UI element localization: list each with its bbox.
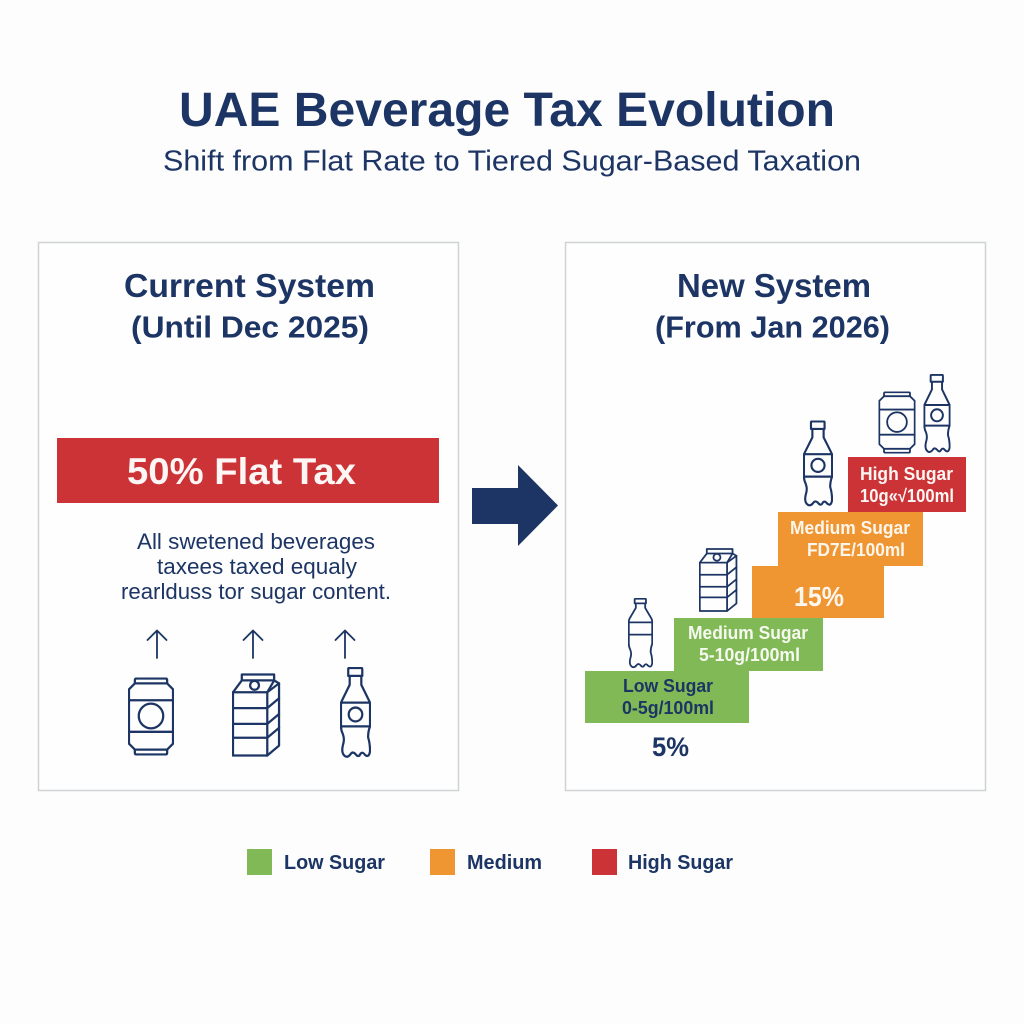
rate: 5%: 5% — [652, 732, 689, 762]
description text: taxees taxed equaly — [157, 554, 357, 579]
panel: current system — [38, 242, 458, 790]
arrow: up over can — [148, 630, 166, 658]
legend item: high sugar: High Sugar — [628, 852, 733, 874]
heading: new system: New System — [677, 267, 871, 304]
flat tax banner: 50% Flat Tax — [127, 451, 356, 492]
description text — [121, 529, 391, 604]
legend item: low sugar — [247, 849, 385, 875]
step: medium sugar green: 5-10g/100ml — [699, 645, 800, 665]
icon: carton — [233, 674, 279, 756]
description text: All swetened beverages — [137, 529, 375, 554]
heading: new system: (From Jan 2026) — [655, 310, 890, 344]
step: 15% rate: 15% — [794, 581, 844, 612]
description text: rearlduss tor sugar content. — [121, 579, 391, 604]
icon: bottle on step — [804, 421, 832, 505]
heading: current system — [124, 267, 375, 344]
heading: current system: (Until Dec 2025) — [131, 310, 369, 344]
legend item: low sugar: Low Sugar — [284, 852, 385, 874]
legend item: high sugar — [592, 849, 733, 875]
icon: plain bottle — [629, 599, 652, 667]
legend item: medium — [430, 849, 542, 875]
icon: can on top step — [879, 392, 915, 453]
step: medium sugar orange: FD7E/100ml — [807, 540, 905, 560]
step: medium sugar orange: Medium Sugar — [790, 518, 910, 538]
flat tax banner — [57, 438, 439, 503]
icon: bottle — [341, 668, 370, 757]
step: low sugar: Low Sugar — [623, 676, 713, 696]
step: high sugar: High Sugar — [860, 464, 953, 484]
arrow: up over bottle — [336, 630, 354, 658]
arrow: current to new — [472, 465, 558, 546]
subtitle: Shift from Flat Rate to Tiered Sugar-Based Taxation — [163, 146, 861, 178]
icon: can — [129, 678, 173, 755]
step: medium sugar orange — [778, 512, 923, 566]
legend — [247, 849, 733, 875]
legend item: medium: Medium — [467, 852, 542, 874]
icon: bottle on top step — [924, 375, 950, 452]
panel: new system — [566, 242, 986, 790]
step: low sugar: 0-5g/100ml — [622, 698, 714, 718]
step: 15% rate — [752, 566, 884, 618]
arrow: up over carton — [244, 630, 262, 658]
step: medium sugar green — [674, 618, 823, 671]
title: UAE Beverage Tax Evolution — [179, 84, 835, 137]
step: high sugar — [848, 457, 966, 512]
icon: carton on step — [700, 549, 736, 611]
heading: new system — [655, 267, 890, 344]
step: high sugar: 10g«√100ml — [860, 486, 954, 506]
heading: current system: Current System — [124, 267, 375, 304]
step: medium sugar green: Medium Sugar — [688, 623, 808, 643]
step: low sugar — [585, 671, 749, 723]
